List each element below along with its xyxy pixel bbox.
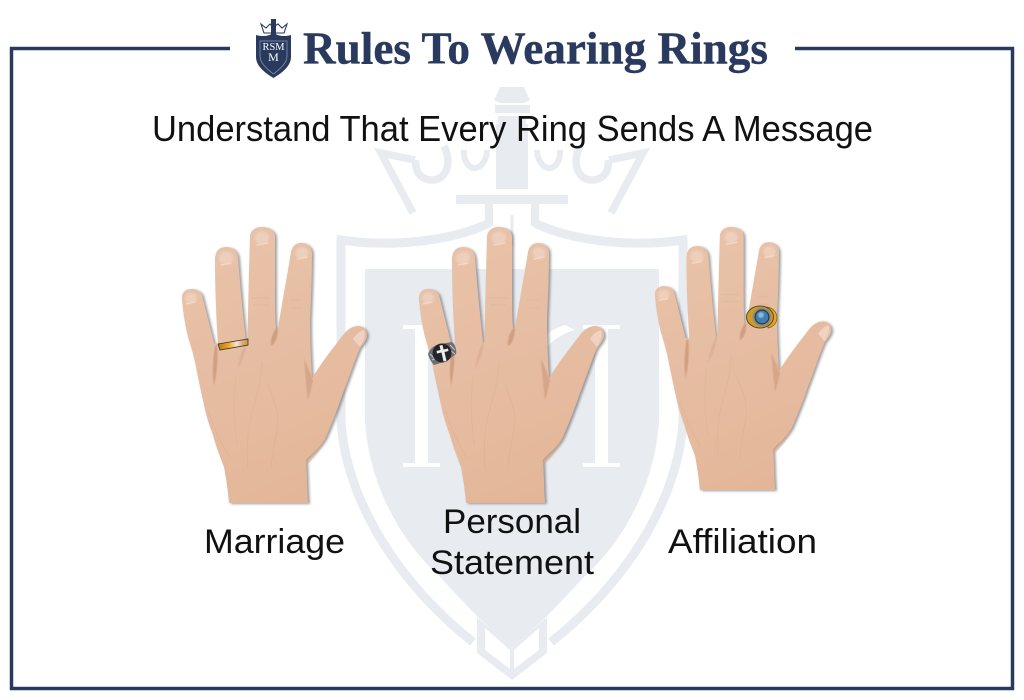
hand: personal statement (419, 227, 606, 504)
ring: gold with blue stone (746, 306, 777, 328)
label: marriage: Marriage (204, 523, 345, 561)
ring: gold wedding band (218, 339, 248, 350)
labels: personal statement: Personal (443, 503, 581, 541)
labels: personal statement (430, 503, 595, 582)
hand: marriage (182, 227, 369, 504)
ring: black cross signet (428, 342, 456, 365)
logo: crowned shield: RSM (262, 42, 285, 53)
title: Rules To Wearing Rings (303, 24, 768, 74)
labels: personal statement: Statement (430, 544, 595, 582)
watermark shield outline (341, 204, 683, 642)
logo crown (261, 24, 287, 33)
logo: crowned shield (256, 19, 291, 78)
logo: crowned shield: M (268, 50, 279, 64)
hand: affiliation (655, 227, 833, 491)
subtitle: Understand That Every Ring Sends A Message (152, 108, 873, 149)
watermark sword (494, 87, 530, 103)
label: affiliation: Affiliation (668, 523, 817, 561)
watermark: shield and sword emblem (341, 87, 683, 680)
watermark crown (381, 146, 643, 213)
watermark lower point (477, 617, 547, 680)
watermark shield fill (365, 269, 659, 648)
watermark monogram (403, 325, 620, 467)
logo shield (256, 33, 291, 78)
